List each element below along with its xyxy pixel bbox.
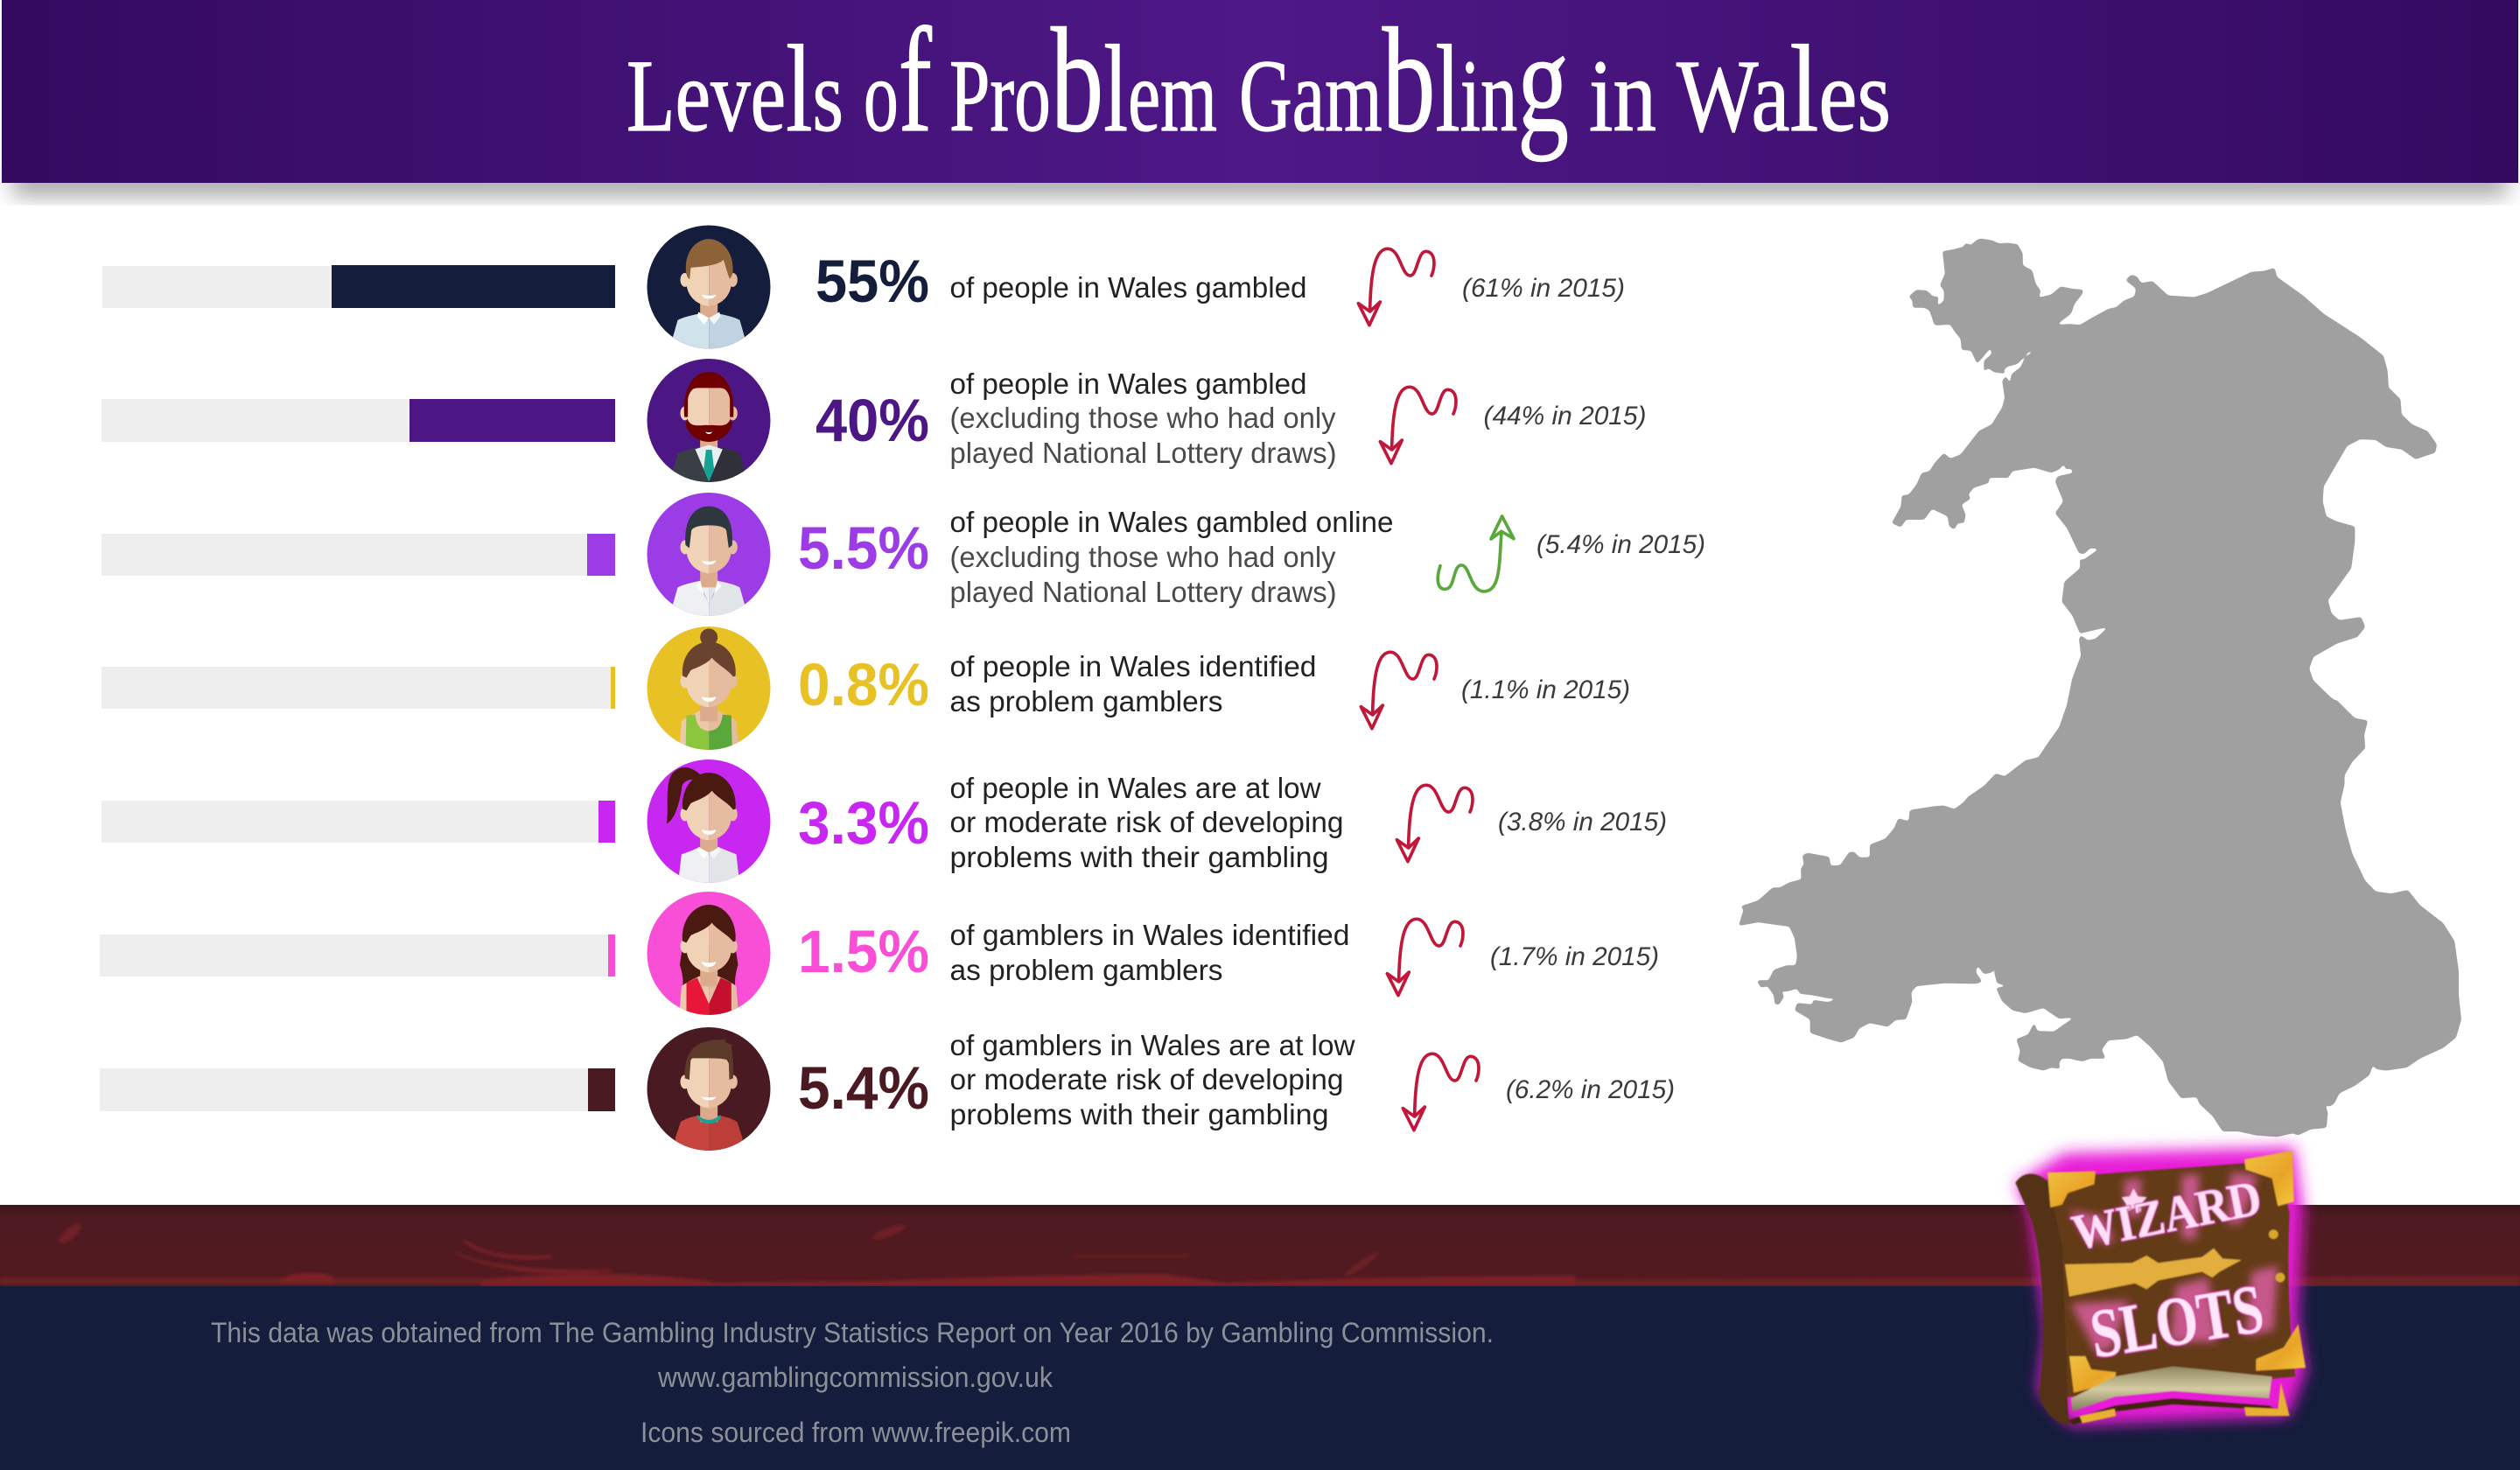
title: Levels: [626, 19, 844, 158]
row 7: 5.4% gamblers low or moderate risk: [100, 1027, 1675, 1151]
description: (excluding those who had only: [950, 402, 1336, 434]
gold strips: [2080, 1382, 2290, 1424]
row 1: 55% people gambled: [102, 226, 1625, 348]
value 5.4%: 5.4%: [798, 1054, 929, 1122]
description: as problem gamblers: [950, 685, 1223, 718]
book pages: [2071, 1367, 2272, 1411]
gold band: [2065, 1249, 2242, 1297]
2015 comparison: (1.1% in 2015): [1461, 676, 1630, 704]
bar 1.5%: [100, 934, 615, 976]
description: [950, 368, 1337, 469]
description: [950, 772, 1344, 873]
footer source text: Icons sourced from www.freepik.com: [640, 1417, 1071, 1448]
spine: [2015, 1173, 2069, 1424]
star: [2122, 1188, 2146, 1212]
avatar: bearded man: [648, 359, 770, 482]
value 5.5%: 5.5%: [798, 514, 929, 582]
avatar: man with spiky hair: [648, 1027, 770, 1151]
description: problems with their gambling: [950, 841, 1328, 873]
logo word SLOTS: SLOTS: [2085, 1270, 2269, 1373]
bar 5.4%: [100, 1068, 615, 1111]
logo: Wizard Slots book: [2015, 1149, 2306, 1424]
row 6: 1.5% gamblers identified: [100, 892, 1659, 1015]
wood band: [0, 1205, 2520, 1286]
avatar: man with brown hair: [648, 226, 770, 348]
arrow up: [1438, 516, 1514, 592]
arrow down: [1403, 1054, 1479, 1130]
avatar: woman with long hair: [648, 892, 770, 1015]
book cover: [2033, 1161, 2295, 1397]
footer panel: [0, 1286, 2520, 1470]
row 4: 0.8% problem gamblers: [102, 626, 1630, 750]
row 2: 40% excluding lottery: [102, 359, 1647, 482]
value 3.3%: 3.3%: [798, 789, 929, 857]
gold corners: [2048, 1151, 2306, 1393]
description: or moderate risk of developing: [950, 806, 1344, 838]
arrow down: [1387, 919, 1463, 996]
description: played National Lottery draws): [950, 576, 1337, 608]
2015 comparison: (44% in 2015): [1484, 402, 1647, 430]
description: played National Lottery draws): [950, 437, 1337, 469]
2015 comparison: (1.7% in 2015): [1490, 942, 1659, 971]
row 5: 3.3% low or moderate risk: [102, 760, 1667, 883]
value 55%: 55%: [816, 248, 929, 315]
arrow down: [1358, 248, 1434, 326]
logo word WIZARD: WIZARD: [2068, 1171, 2265, 1261]
title: [626, 0, 1891, 163]
footer source text: This data was obtained from The Gambling Industry Statistics Report on Year 2016 by Gambling Commission.: [211, 1317, 1494, 1348]
avatar: woman with ponytail: [648, 760, 770, 883]
footer source text: www.gamblingcommission.gov.uk: [657, 1362, 1054, 1393]
description: problems with their gambling: [950, 1098, 1328, 1130]
title: Gambling: [1239, 0, 1569, 163]
avatar: woman with bun: [648, 626, 770, 750]
bar 3.3%: [102, 801, 615, 843]
arrow down: [1361, 652, 1437, 729]
title: in: [1589, 38, 1656, 153]
studs: [2269, 1229, 2285, 1282]
header banner: [2, 0, 2518, 195]
2015 comparison: (6.2% in 2015): [1506, 1075, 1675, 1104]
description: [950, 506, 1393, 608]
value 0.8%: 0.8%: [798, 651, 929, 718]
description: [950, 650, 1316, 718]
2015 comparison: (3.8% in 2015): [1498, 808, 1667, 836]
description: [950, 1029, 1355, 1130]
description: or moderate risk of developing: [950, 1063, 1344, 1096]
description: (excluding those who had only: [950, 541, 1336, 573]
2015 comparison: (61% in 2015): [1462, 274, 1625, 303]
description: of gamblers in Wales identified: [950, 919, 1349, 951]
map of Wales: [1739, 239, 2461, 1137]
arrow down: [1396, 785, 1473, 862]
arrow down: [1380, 387, 1456, 464]
description: of people in Wales are at low: [950, 772, 1321, 804]
bar 55%: [102, 265, 615, 308]
title: of: [864, 0, 932, 163]
row 3: 5.5% online: [102, 493, 1705, 616]
footer source text: [211, 1317, 1494, 1448]
magenta glow: [2019, 1149, 2304, 1424]
title: Problem: [949, 0, 1217, 163]
pink rays: [2069, 1172, 2278, 1354]
2015 comparison: (5.4% in 2015): [1536, 530, 1705, 559]
description: of people in Wales gambled online: [950, 506, 1393, 538]
description: of gamblers in Wales are at low: [950, 1029, 1355, 1061]
description: [950, 919, 1349, 986]
description: of people in Wales gambled: [950, 271, 1307, 304]
bar 0.8%: [102, 667, 615, 709]
avatar: man with dark hair: [648, 493, 770, 616]
title: Wales: [1676, 19, 1891, 158]
bar 40%: [102, 399, 615, 442]
description: of people in Wales identified: [950, 650, 1316, 682]
value 1.5%: 1.5%: [798, 918, 929, 985]
description: as problem gamblers: [950, 954, 1223, 986]
value 40%: 40%: [816, 387, 929, 454]
description: of people in Wales gambled: [950, 368, 1307, 400]
bar 5.5%: [102, 534, 615, 576]
